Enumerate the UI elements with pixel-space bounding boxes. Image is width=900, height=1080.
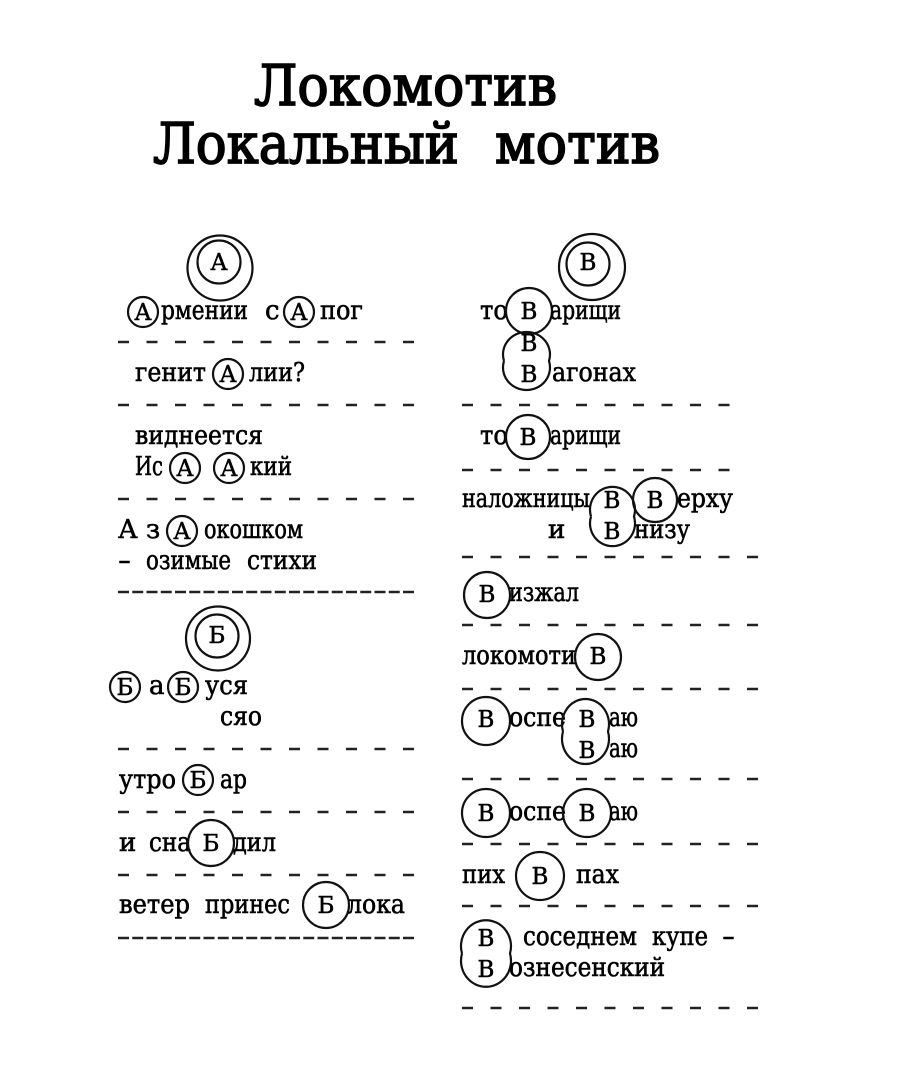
text: ветер принес Блока: лока bbox=[347, 890, 405, 920]
text: и сна Бдил: дил bbox=[233, 828, 276, 858]
text: А за окошком – озимые стихи: А bbox=[118, 515, 138, 545]
panel: right column, letter В bbox=[461, 234, 759, 1008]
text: наложницы вверху и внизу: низу bbox=[634, 515, 690, 545]
text: Армении с Апог: рмении bbox=[161, 296, 248, 326]
text: В соседнем купе – Вознесенский bbox=[461, 920, 735, 987]
text: пих В пах: пах bbox=[576, 860, 619, 890]
text: воспеваю: оспе bbox=[509, 797, 566, 827]
text: пих В пах bbox=[462, 852, 619, 900]
icon: big letter А in double circle: А bbox=[210, 250, 228, 276]
text: Бабуся сяо: сяо bbox=[220, 702, 262, 732]
title: Локальный bbox=[153, 112, 459, 177]
text: товарищи: то bbox=[480, 421, 508, 451]
text: локомотив: локомоти bbox=[462, 641, 576, 671]
text: В соседнем купе – Вознесенский: - bbox=[722, 922, 735, 952]
text: В вагонах: В bbox=[521, 331, 537, 357]
text: ветер принес Блока: Б bbox=[318, 893, 334, 919]
text: Бабуся сяо: Б bbox=[175, 675, 191, 701]
text: виднеется Исаакий: виднеется bbox=[135, 421, 263, 451]
text: воспеваю, ваю: аю bbox=[609, 703, 638, 733]
text: виднеется Исаакий: Ис bbox=[135, 452, 163, 482]
text: и сна Бдил: сна bbox=[149, 828, 191, 858]
text: утро Бар: утро bbox=[119, 765, 176, 795]
text: В соседнем купе – Вознесенский: В bbox=[478, 957, 494, 983]
text: и сна Бдил: и bbox=[119, 828, 136, 858]
text: товарищи: арищи bbox=[550, 296, 621, 326]
text: локомотив bbox=[462, 634, 621, 680]
text: генит Алии? bbox=[135, 358, 305, 389]
text: наложницы вверху и внизу: В bbox=[647, 488, 663, 514]
text: В соседнем купе – Вознесенский: купе bbox=[652, 922, 708, 952]
text: наложницы вверху и внизу: наложницы bbox=[462, 484, 590, 514]
text: виднеется Исаакий bbox=[135, 421, 292, 483]
text: Армении с Апог: с bbox=[265, 296, 280, 326]
text: воспеваю: аю bbox=[609, 797, 638, 827]
text: воспеваю, ваю: В bbox=[478, 707, 494, 733]
text: А за окошком – озимые стихи: окошком bbox=[204, 515, 303, 545]
text: и сна Бдил bbox=[119, 820, 276, 866]
text: утро Бар: ар bbox=[220, 765, 247, 795]
title: мотив bbox=[495, 112, 660, 177]
text: виднеется Исаакий: кий bbox=[250, 452, 292, 482]
text: А за окошком – озимые стихи: А bbox=[173, 519, 191, 545]
text: воспеваю: В bbox=[478, 801, 494, 827]
text: Бабуся сяо bbox=[110, 671, 262, 732]
text: визжал: В bbox=[479, 582, 495, 608]
text: воспеваю, ваю: оспе bbox=[509, 703, 566, 733]
text: В вагонах bbox=[503, 331, 636, 390]
text: локомотив: В bbox=[590, 644, 606, 670]
text: Бабуся сяо: уся bbox=[205, 671, 248, 701]
text: Армении с Апог: пог bbox=[320, 296, 363, 326]
text: А за окошком – озимые стихи bbox=[118, 515, 317, 576]
text: Армении с Апог bbox=[128, 296, 363, 327]
text: В соседнем купе – Вознесенский: соседнем bbox=[523, 922, 637, 952]
text: воспеваю, ваю: В bbox=[579, 707, 595, 733]
text: генит Алии?: А bbox=[219, 362, 237, 388]
text: генит Алии?: генит bbox=[135, 358, 206, 388]
panel: left column, letters А and Б bbox=[110, 236, 414, 938]
text: Армении с Апог: А bbox=[134, 300, 152, 326]
text: пих В пах: В bbox=[532, 864, 548, 890]
text: воспеваю, ваю: аю bbox=[609, 734, 638, 764]
title: Локомотив bbox=[254, 54, 557, 119]
text: ветер принес Блока bbox=[119, 882, 405, 928]
text: визжал bbox=[464, 572, 579, 618]
icon: big letter В in double circle: В bbox=[580, 250, 596, 276]
text: товарищи: В bbox=[521, 299, 537, 325]
text: В вагонах: агонах bbox=[552, 358, 636, 388]
text: А за окошком – озимые стихи: - bbox=[118, 546, 131, 576]
text: В соседнем купе – Вознесенский: В bbox=[478, 926, 494, 952]
text: А за окошком – озимые стихи: озимые bbox=[146, 546, 231, 576]
icon: big letter Б in double circle: Б bbox=[209, 623, 225, 649]
text: Бабуся сяо: а bbox=[149, 671, 165, 701]
text: наложницы вверху и внизу: ерху bbox=[677, 484, 733, 514]
text: и сна Бдил: Б bbox=[203, 831, 219, 857]
text: В соседнем купе – Вознесенский: ознесенский bbox=[509, 953, 665, 983]
text: Бабуся сяо: Б bbox=[117, 675, 133, 701]
icon: big letter А in double circle bbox=[188, 236, 252, 300]
text: ветер принес Блока: ветер bbox=[119, 890, 190, 920]
text: товарищи bbox=[480, 415, 621, 459]
text: виднеется Исаакий: А bbox=[220, 456, 238, 482]
text: воспеваю: В bbox=[579, 801, 595, 827]
text: утро Бар bbox=[119, 765, 247, 795]
text: наложницы вверху и внизу: и bbox=[548, 515, 565, 545]
text: воспеваю, ваю: В bbox=[579, 738, 595, 764]
text: Армении с Апог: А bbox=[290, 300, 308, 326]
text: пих В пах: пих bbox=[462, 860, 505, 890]
text: товарищи: то bbox=[480, 296, 508, 326]
text: товарищи bbox=[480, 288, 621, 334]
text: А за окошком – озимые стихи: стихи bbox=[247, 546, 317, 576]
text: наложницы вверху и внизу bbox=[462, 478, 733, 546]
text: А за окошком – озимые стихи: з bbox=[146, 515, 160, 545]
icon: big letter В in double circle bbox=[559, 234, 625, 300]
title bbox=[153, 54, 660, 177]
text: наложницы вверху и внизу: В bbox=[604, 488, 620, 514]
text: товарищи: В bbox=[520, 425, 536, 451]
text: визжал: изжал bbox=[509, 578, 579, 608]
text: генит Алии?: лии? bbox=[249, 358, 305, 388]
text: воспеваю, ваю bbox=[462, 697, 638, 764]
text: утро Бар: Б bbox=[190, 768, 206, 794]
text: товарищи: арищи bbox=[550, 421, 621, 451]
text: ветер принес Блока: принес bbox=[205, 890, 290, 920]
text: воспеваю bbox=[462, 789, 638, 837]
text: виднеется Исаакий: А bbox=[176, 456, 194, 482]
icon: big letter Б in double circle bbox=[186, 606, 250, 670]
text: В вагонах: В bbox=[521, 362, 537, 388]
text: наложницы вверху и внизу: В bbox=[604, 519, 620, 545]
